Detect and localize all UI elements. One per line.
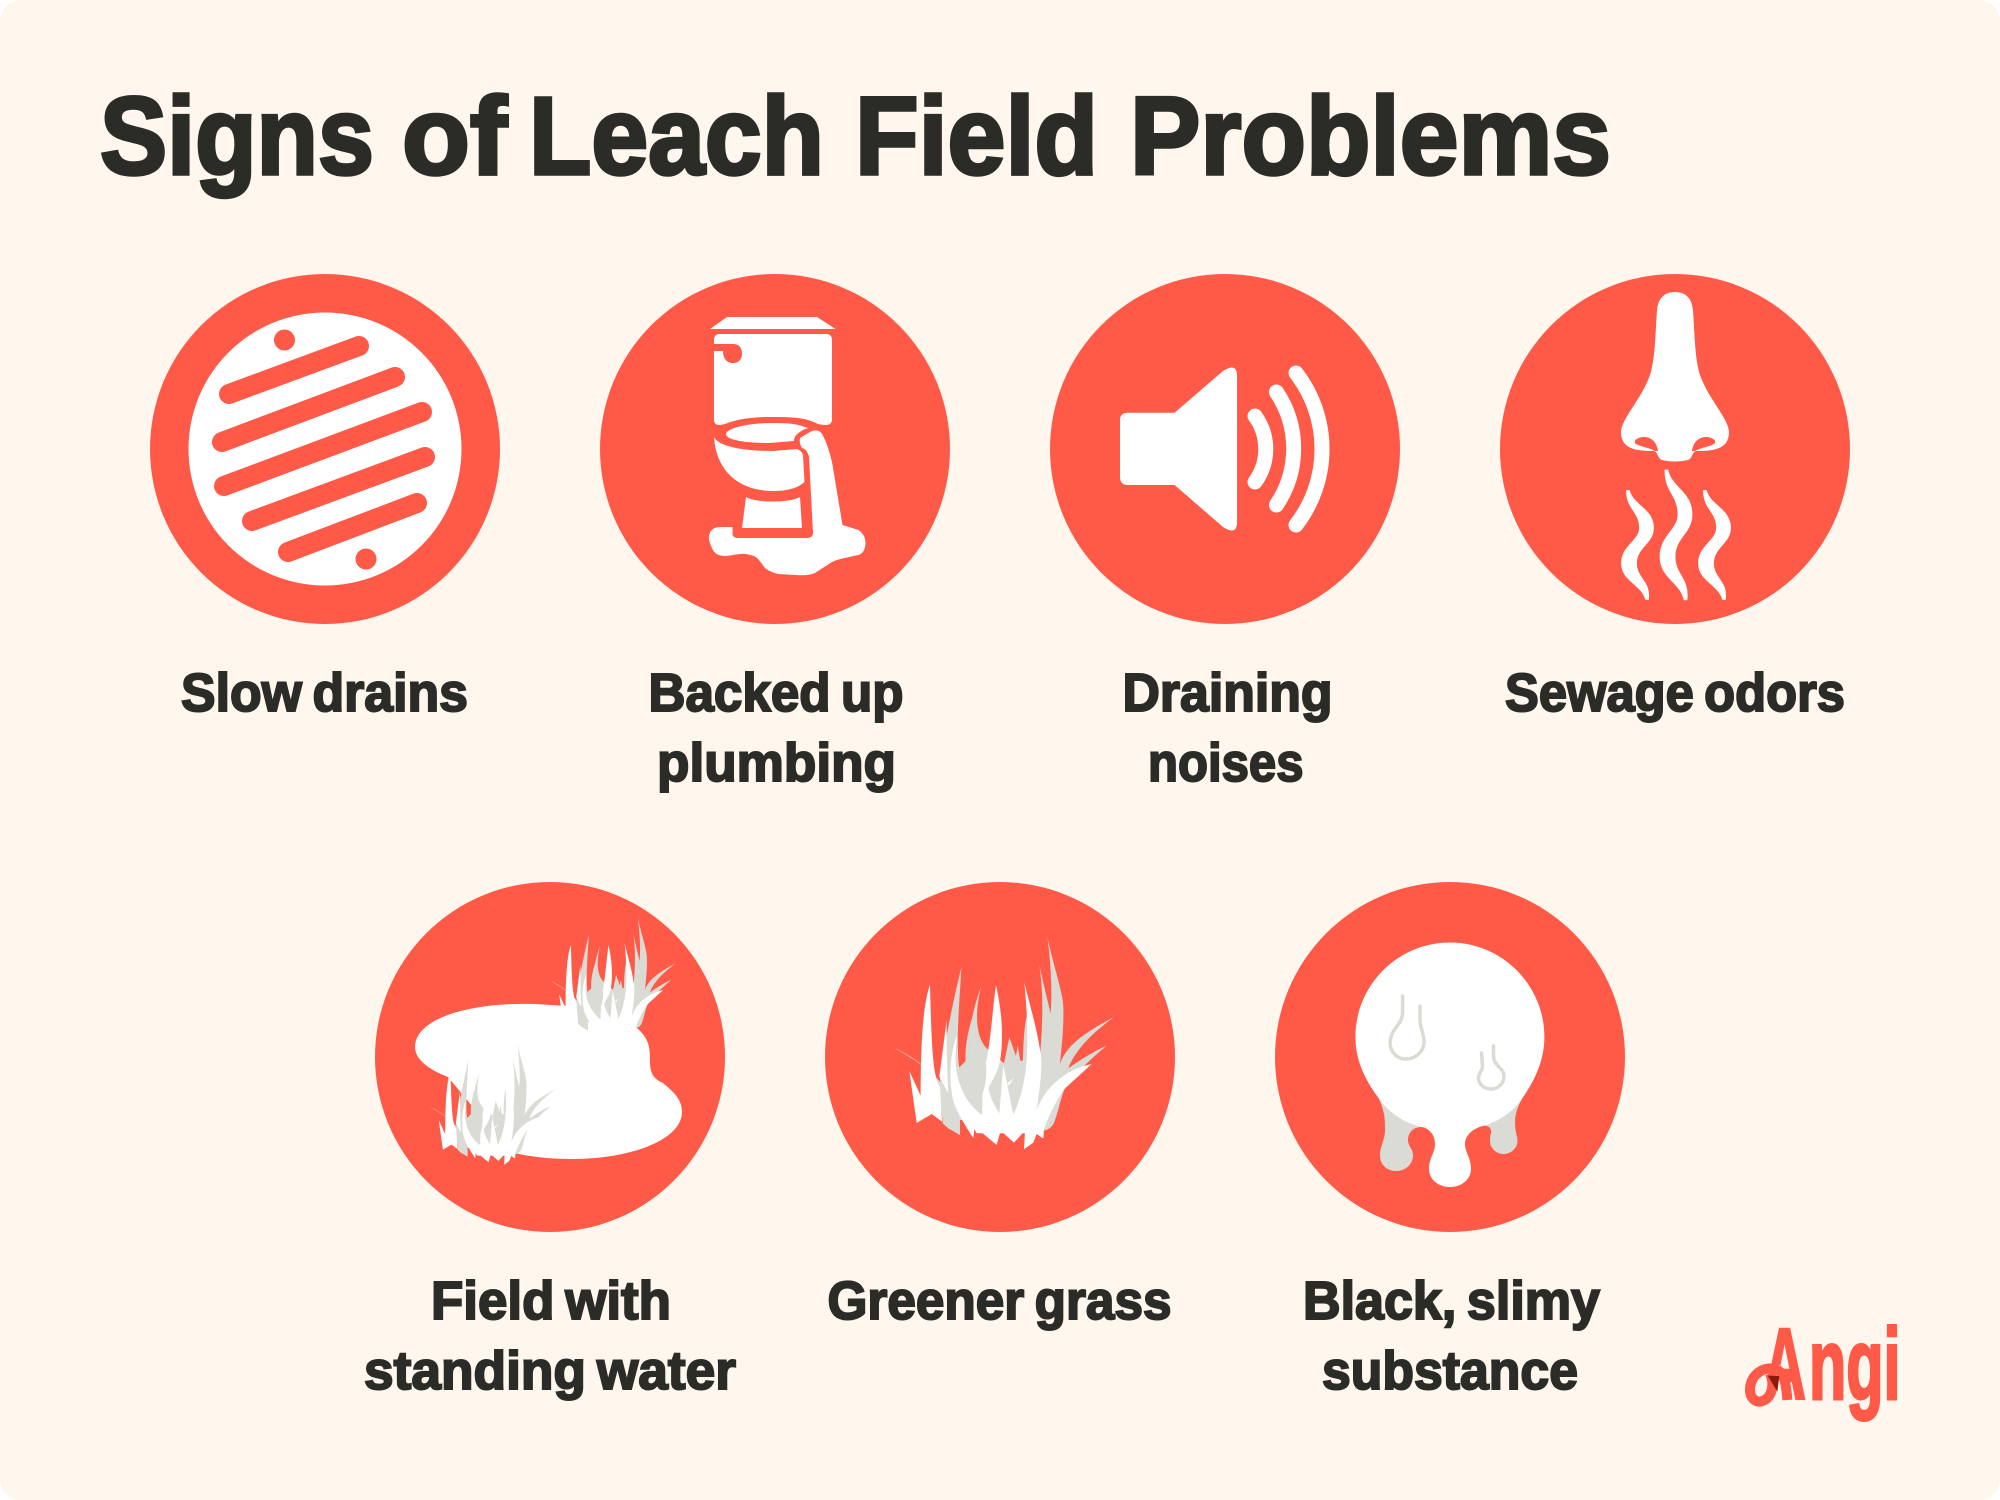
logo: Angi: [1745, 1324, 1898, 1422]
title: [100, 75, 1611, 198]
label: field with standing water: [364, 1271, 736, 1401]
icon: slime blob: [1275, 882, 1625, 1232]
panel: backed up plumbing: [600, 274, 950, 793]
label: slow drains: Slow drains: [181, 663, 468, 723]
title: Field: [855, 75, 1098, 198]
label: backed up plumbing: Backed up: [648, 663, 904, 723]
label: greener grass: Greener grass: [828, 1271, 1172, 1331]
label: black slimy substance: substance: [1322, 1341, 1578, 1401]
icon: grass tuft: [825, 882, 1175, 1232]
label: field with standing water: Field with: [431, 1271, 671, 1331]
label: field with standing water: standing water: [364, 1341, 736, 1401]
label: draining noises: [1122, 663, 1332, 793]
label: black slimy substance: [1303, 1271, 1600, 1401]
logo: Angi: ngi: [1809, 1309, 1900, 1421]
title: Problems: [1130, 75, 1611, 198]
icon: overflowing toilet: [600, 274, 950, 624]
panel: greener grass: [825, 882, 1175, 1331]
panel: field with standing water: [364, 882, 736, 1401]
logo: Angi: A: [1763, 1309, 1806, 1421]
label: sewage odors: Sewage odors: [1505, 663, 1845, 723]
label: backed up plumbing: plumbing: [657, 733, 896, 793]
icon: speaker: [1050, 274, 1400, 624]
icon: nose and odor fumes: [1500, 274, 1850, 624]
panel: slow drains: [150, 274, 500, 723]
label: draining noises: Draining: [1122, 663, 1332, 723]
label: black slimy substance: Black, slimy: [1303, 1271, 1600, 1331]
title: Signs: [100, 75, 374, 198]
icon: puddle with grass: [375, 882, 725, 1232]
label: draining noises: noises: [1148, 733, 1304, 793]
panel: sewage odors: [1500, 274, 1850, 723]
panel: draining noises: [1050, 274, 1400, 793]
icon: drain cover: [150, 274, 500, 624]
panel: black slimy substance: [1275, 882, 1625, 1401]
title: of: [402, 75, 507, 198]
title: Leach: [529, 75, 824, 198]
label: backed up plumbing: [648, 663, 904, 793]
